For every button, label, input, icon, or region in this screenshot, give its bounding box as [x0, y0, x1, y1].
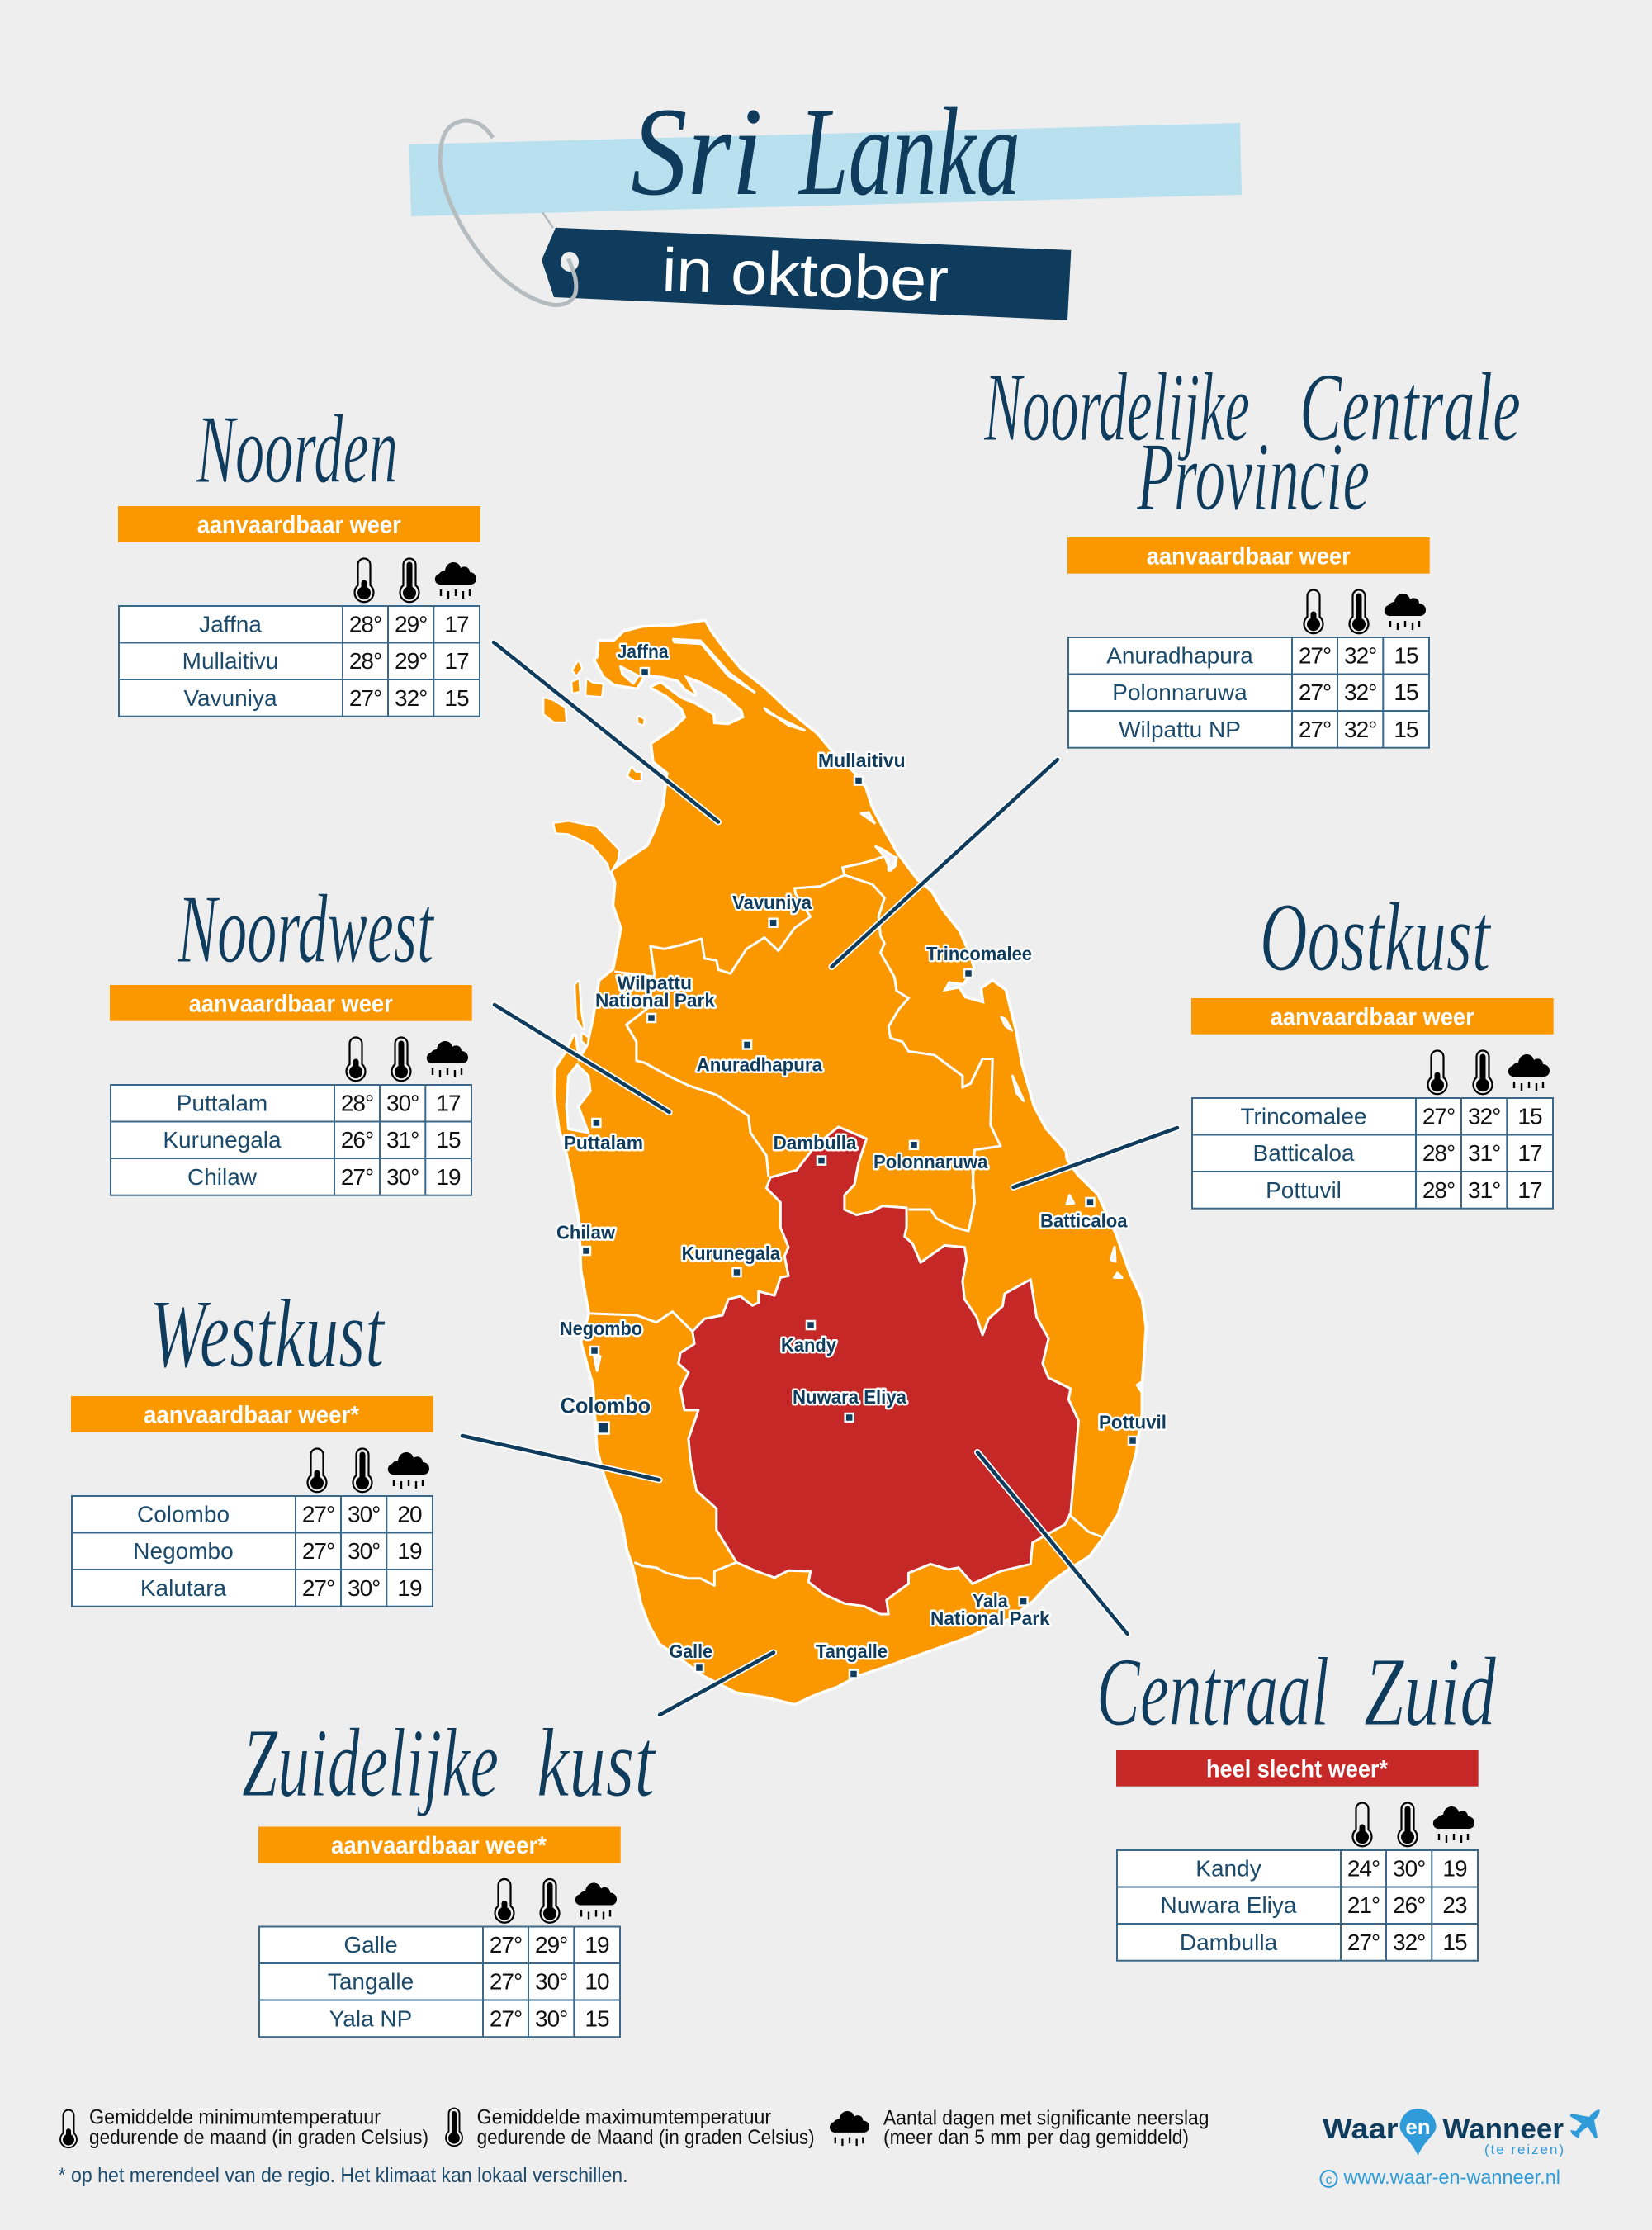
weather table: Colombo [137, 1502, 230, 1527]
weather table: 15 [1394, 679, 1418, 705]
weather table: 17 [1517, 1177, 1542, 1203]
weather table: 15 [585, 2006, 609, 2031]
weather table: 32° [1393, 1929, 1425, 1955]
legend [59, 2106, 1209, 2187]
city labels: Kurunegala [682, 1243, 780, 1264]
weather table: 32° [1468, 1104, 1500, 1129]
weather table: 30° [1393, 1856, 1425, 1882]
map of Sri Lanka [462, 622, 1177, 1715]
subtitle tag: in oktober [660, 235, 949, 315]
region: Centraal Zuid (red) [679, 1127, 1078, 1614]
weather table: 15 [444, 685, 469, 711]
logo: Waar en Wanneer [1321, 2109, 1600, 2189]
weather table: 19 [585, 1932, 609, 1958]
tag string loop [440, 121, 576, 305]
tag string back [542, 212, 553, 228]
city labels: Batticaloa [1040, 1210, 1128, 1232]
weather table: 23 [1442, 1892, 1467, 1918]
heading: Oostkust [1260, 883, 1492, 992]
region borders south [590, 1170, 1103, 1585]
weather table: 32° [1344, 643, 1376, 669]
heading: Noordelijke [983, 353, 1250, 462]
weather table: 28° [1422, 1177, 1455, 1203]
icon: map pin [1400, 2109, 1437, 2156]
footnote: * op het merendeel van de regio. Het klimaat kan lokaal verschillen. [59, 2164, 628, 2187]
weather table: 32° [1344, 717, 1376, 742]
city labels: Colombo [561, 1393, 651, 1418]
weather table: 27° [490, 2006, 522, 2031]
weather table: 19 [1442, 1856, 1467, 1882]
panel: Zuidelijke kust [242, 1708, 657, 2037]
weather table: aanvaardbaar weer [189, 991, 393, 1017]
weather table: Negombo [133, 1538, 234, 1564]
weather table: aanvaardbaar weer [197, 512, 401, 538]
logo: Waar en Wanneer: (te reizen) [1484, 2142, 1565, 2157]
weather table: 17 [444, 648, 469, 674]
weather table: 10 [585, 1968, 609, 1995]
city labels: Nuwara Eliya [793, 1386, 906, 1408]
legend: rain days: (meer dan 5 mm per dag gemiddeld) [883, 2126, 1189, 2149]
weather table: 27° [302, 1575, 334, 1601]
city labels: Pottuvil [1099, 1412, 1167, 1433]
weather table: Kandy [1195, 1856, 1261, 1882]
weather table: aanvaardbaar weer [1147, 543, 1351, 570]
city labels: Puttalam [564, 1132, 643, 1153]
title: Sri Lanka: Sri [631, 82, 763, 222]
heading: Provincie [1136, 422, 1370, 531]
weather table: 30° [348, 1575, 380, 1601]
weather table: 27° [1422, 1104, 1455, 1129]
city labels: Trincomalee [926, 943, 1032, 964]
weather table: 17 [444, 612, 469, 637]
heading: Noorden [196, 395, 398, 504]
legend: min temperature: gedurende de maand (in graden Celsius) [89, 2126, 428, 2149]
heading: kust [537, 1708, 657, 1817]
weather table [1191, 998, 1554, 1209]
weather table: 30° [535, 1968, 567, 1995]
weather table: Kalutara [140, 1575, 227, 1601]
weather table: Kurunegala [163, 1127, 282, 1153]
lagoons east and south [594, 1195, 1141, 1391]
weather table: 28° [349, 648, 381, 674]
heading: Centrale [1299, 353, 1521, 462]
heading [1096, 1637, 1497, 1746]
title: Sri Lanka [631, 82, 1020, 222]
weather table: Batticaloa [1253, 1140, 1355, 1166]
weather table: 31° [1468, 1140, 1500, 1166]
city labels: Polonnaruwa [873, 1151, 988, 1172]
heading: Westkust [149, 1279, 386, 1388]
weather table: 29° [395, 648, 427, 674]
city labels: Yala [973, 1590, 1008, 1612]
title band [409, 123, 1242, 216]
weather table: Dambulla [1180, 1929, 1278, 1955]
weather table: 27° [302, 1538, 334, 1564]
title: Sri Lanka: Lanka [798, 82, 1020, 222]
weather table: Jaffna [199, 612, 262, 637]
weather table: 30° [348, 1502, 380, 1527]
city labels: Dambulla [774, 1132, 857, 1153]
legend: min temperature [60, 2106, 428, 2149]
weather table: 29° [395, 612, 427, 637]
weather table: 27° [490, 1932, 522, 1958]
weather table: 27° [1299, 679, 1331, 705]
weather table: Anuradhapura [1106, 643, 1253, 669]
islands and lagoons north [544, 639, 1024, 1133]
panel: Noordwest [110, 874, 472, 1195]
city labels [556, 641, 1167, 1662]
weather table: 19 [397, 1538, 422, 1564]
weather table: Mullaitivu [182, 648, 278, 674]
weather table: Galle [343, 1932, 398, 1958]
weather table: aanvaardbaar weer* [331, 1832, 547, 1859]
weather table: Chilaw [187, 1164, 258, 1190]
weather table: 20 [397, 1502, 422, 1527]
city labels: Anuradhapura [697, 1054, 822, 1076]
heading: Centraal [1096, 1637, 1329, 1746]
weather table: 29° [535, 1932, 567, 1958]
weather table: 15 [1394, 643, 1418, 669]
weather table: 17 [436, 1091, 461, 1116]
subtitle tag [542, 228, 1071, 320]
weather table: 30° [535, 2006, 567, 2031]
weather table: Polonnaruwa [1112, 679, 1247, 705]
weather table: 27° [341, 1164, 373, 1190]
land fill [556, 622, 1144, 1703]
weather table: 27° [349, 685, 381, 711]
legend: rain days: Aantal dagen met significante neerslag [883, 2106, 1209, 2129]
weather table: 32° [1344, 679, 1376, 705]
weather table: 27° [302, 1502, 334, 1527]
weather table: 30° [348, 1538, 380, 1564]
city labels: Wilpattu [618, 973, 692, 994]
weather table [1067, 537, 1430, 748]
heading [983, 353, 1521, 531]
weather table: 31° [386, 1127, 419, 1153]
panel: Noorden [118, 395, 480, 717]
city labels: Jaffna [618, 641, 669, 662]
weather table: aanvaardbaar weer* [144, 1402, 359, 1428]
panel: Westkust [71, 1279, 433, 1607]
weather table: 26° [341, 1127, 373, 1153]
website: www.waar-en-wanneer.nl [1343, 2166, 1560, 2189]
weather table: 30° [386, 1091, 419, 1116]
weather table: Puttalam [177, 1091, 267, 1116]
weather table: 15 [1394, 717, 1418, 742]
legend: max temperature [446, 2106, 815, 2149]
city labels: Chilaw [556, 1222, 615, 1243]
weather table: 28° [341, 1091, 373, 1116]
weather table: Wilpattu NP [1119, 717, 1241, 742]
weather table: 15 [1517, 1104, 1542, 1129]
logo: Waar en Wanneer: Waar [1323, 2114, 1399, 2145]
heading: Noordwest [177, 874, 435, 983]
logo: Waar en Wanneer: en [1405, 2114, 1431, 2139]
weather table [118, 506, 480, 717]
weather table: 27° [1347, 1929, 1380, 1955]
icon: airplane [1570, 2109, 1600, 2138]
panel: Noordelijke Centrale Provincie [983, 353, 1521, 748]
city labels: National Park [930, 1607, 1050, 1629]
weather table: 19 [397, 1575, 422, 1601]
city labels: Galle [670, 1641, 712, 1662]
weather table: 26° [1393, 1892, 1425, 1918]
city labels: Tangalle [816, 1641, 888, 1662]
weather table: 21° [1347, 1892, 1380, 1918]
city markers [582, 668, 1137, 1678]
weather table: 28° [1422, 1140, 1455, 1166]
city labels: Kandy [781, 1334, 836, 1356]
weather table: Yala NP [329, 2006, 412, 2031]
weather table: Pottuvil [1266, 1177, 1342, 1203]
title block [409, 82, 1242, 320]
logo: Waar en Wanneer: Wanneer [1442, 2114, 1564, 2145]
leader lines [462, 642, 1177, 1715]
weather table: 27° [1299, 643, 1331, 669]
weather table: 17 [1517, 1140, 1542, 1166]
city labels: Mullaitivu [818, 750, 906, 771]
weather table [258, 1826, 621, 2037]
weather table: Nuwara Eliya [1161, 1892, 1297, 1918]
weather table: 32° [395, 685, 427, 711]
panel: Centraal Zuid [1096, 1637, 1497, 1961]
region borders north [614, 856, 1001, 1189]
weather table: 30° [386, 1164, 419, 1190]
legend: max temperature: gedurende de Maand (in graden Celsius) [477, 2126, 815, 2149]
weather table: 15 [1442, 1929, 1467, 1955]
city labels: Negombo [560, 1318, 642, 1339]
weather table: 27° [1299, 717, 1331, 742]
city labels: National Park [595, 990, 715, 1011]
city labels: Vavuniya [732, 892, 812, 913]
weather table: aanvaardbaar weer [1271, 1004, 1474, 1030]
weather table [71, 1396, 433, 1607]
heading: Zuid [1364, 1637, 1497, 1746]
weather table: 15 [436, 1127, 461, 1153]
legend: max temperature: Gemiddelde maximumtemperatuur [477, 2106, 771, 2129]
weather table: Vavuniya [183, 685, 277, 711]
legend: rain days [830, 2106, 1209, 2149]
weather table: 27° [490, 1968, 522, 1995]
panel: Oostkust [1191, 883, 1554, 1209]
weather table: Tangalle [328, 1968, 414, 1995]
land outline [556, 622, 1144, 1703]
weather table: 28° [349, 612, 381, 637]
weather table: heel slecht weer* [1206, 1755, 1388, 1783]
heading: Zuidelijke [242, 1708, 499, 1817]
weather table: 31° [1468, 1177, 1500, 1203]
website: c [1326, 2173, 1332, 2187]
legend: min temperature: Gemiddelde minimumtemperatuur [89, 2106, 381, 2129]
weather table: Trincomalee [1240, 1104, 1367, 1129]
weather table: 19 [436, 1164, 461, 1190]
weather table [110, 985, 472, 1195]
weather table: 24° [1347, 1856, 1380, 1882]
weather table [1116, 1750, 1479, 1961]
